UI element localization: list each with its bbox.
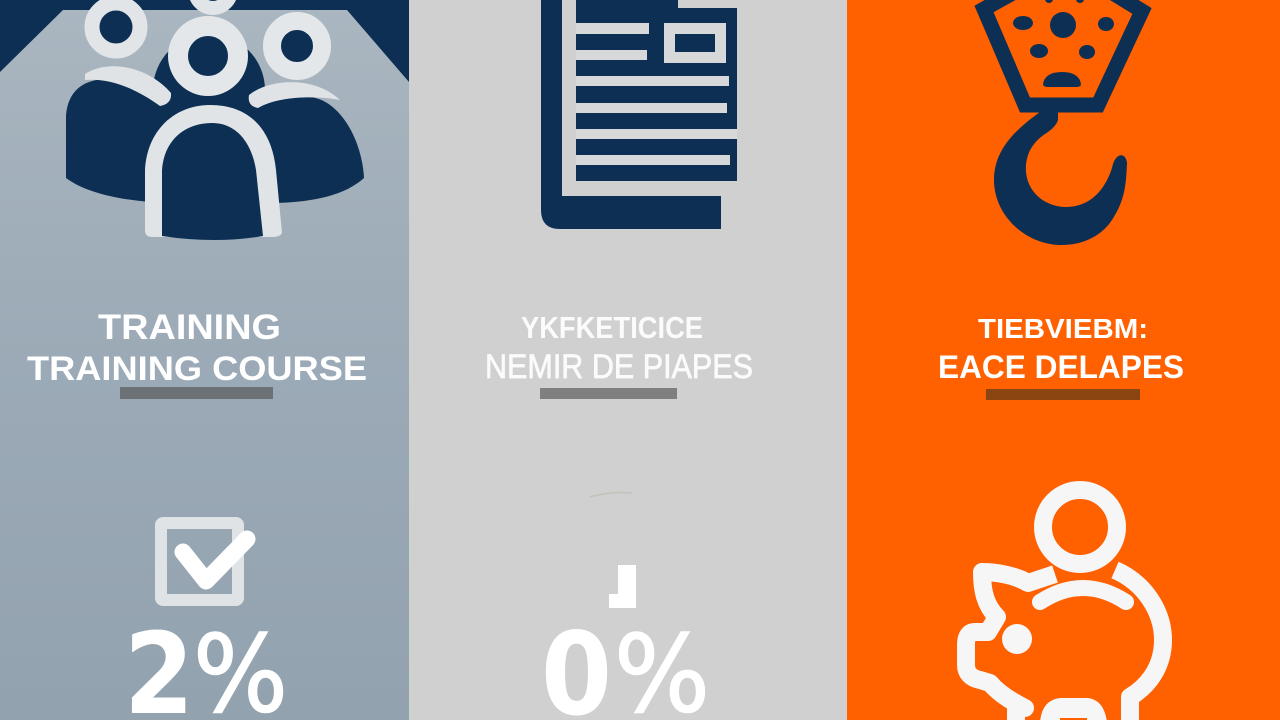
icon: group of people bbox=[66, 0, 364, 240]
stat: 2 percent bbox=[124, 610, 288, 720]
heading: training course: TRAINING COURSE bbox=[27, 350, 367, 388]
underline bar bbox=[120, 387, 273, 399]
heading: training course: TRAINING bbox=[98, 308, 281, 347]
heading: training course bbox=[27, 308, 367, 388]
heading: right column bbox=[938, 313, 1184, 385]
heading: middle column: NEMIR DE PIAPES bbox=[485, 348, 753, 386]
icon: document bbox=[541, 0, 737, 229]
heading: middle column: YKFKETICICE bbox=[521, 310, 703, 345]
underline bar bbox=[540, 388, 677, 399]
underline bar bbox=[986, 389, 1140, 400]
heading: right column: EACE DELAPES bbox=[938, 349, 1184, 385]
icon: checkbox bbox=[161, 523, 247, 600]
icon: crane hook bbox=[984, 0, 1142, 245]
panel: training course bbox=[0, 0, 409, 720]
stat: 0 percent bbox=[541, 608, 710, 720]
heading: middle column bbox=[485, 310, 753, 386]
icon: piggy bank with coin bbox=[966, 490, 1163, 720]
heading: right column: TIEBVIEBM: bbox=[978, 313, 1148, 344]
smudge bbox=[590, 492, 632, 497]
panel: middle column bbox=[409, 0, 847, 720]
dark top banner bbox=[0, 0, 409, 82]
icon: small block bbox=[609, 565, 636, 608]
panel: right column bbox=[847, 0, 1280, 720]
